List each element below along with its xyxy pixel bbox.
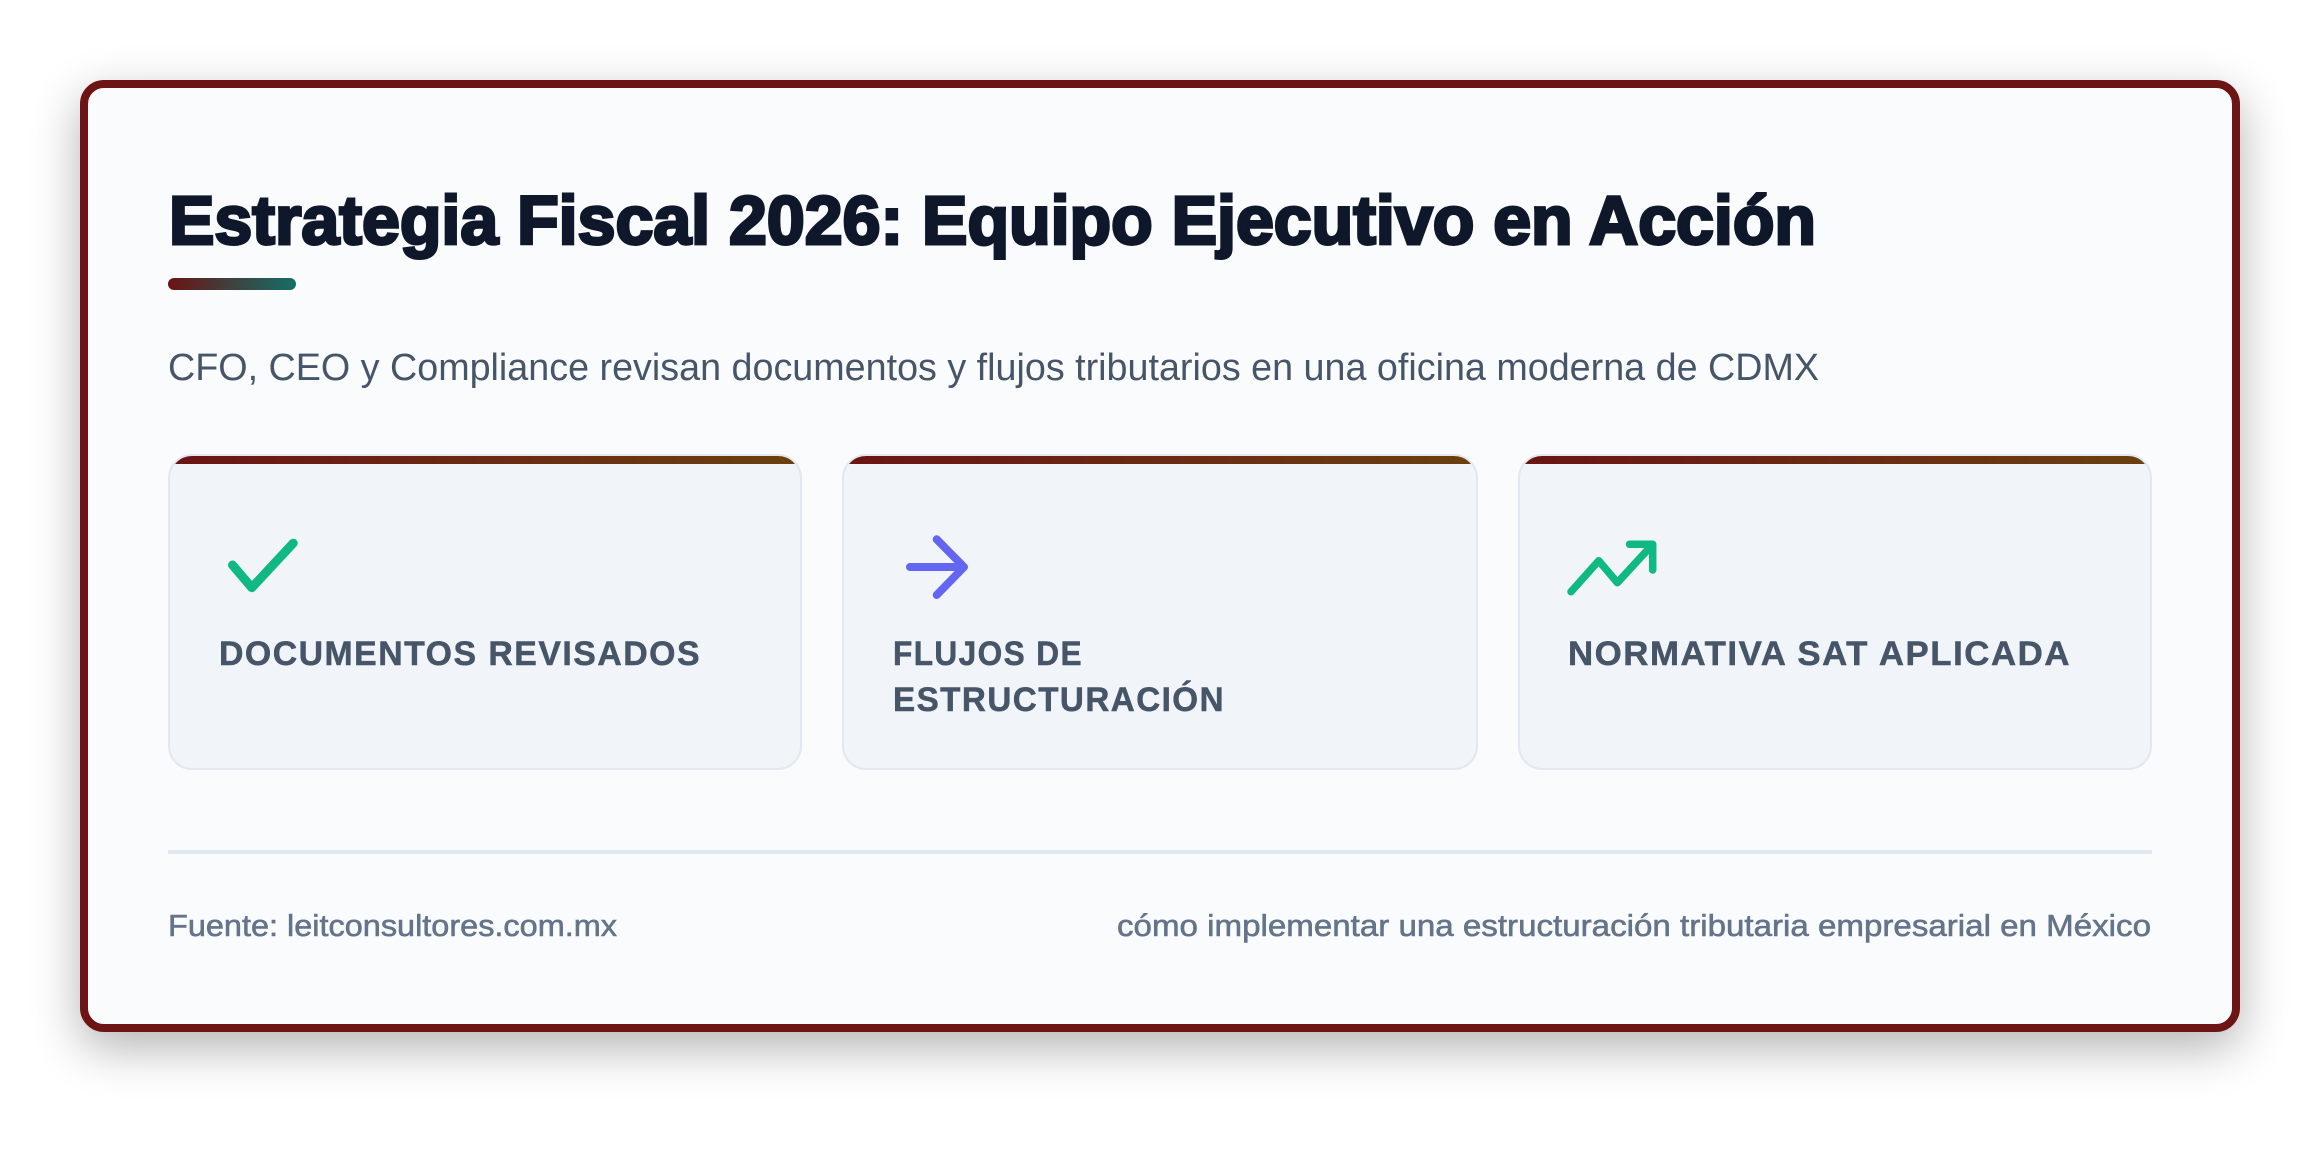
label: normativa sat aplicada: NORMATIVA SAT APLICADA	[1568, 635, 2071, 673]
footer topic: cómo implementar una estructuración tributaria empresarial en México	[1117, 908, 2151, 943]
divider	[168, 850, 2152, 854]
label: flujos de estructuracion	[893, 635, 1225, 719]
label: documentos revisados: DOCUMENTOS REVISADOS	[219, 635, 701, 673]
label: flujos de estructuracion: FLUJOS DE	[893, 635, 1083, 673]
panel: flujos de estructuracion	[842, 454, 1478, 770]
title: Estrategia Fiscal 2026: Equipo Ejecutivo en Acción	[169, 182, 1816, 259]
accent bar under title	[168, 278, 296, 290]
icon: arrow right	[906, 535, 968, 599]
subtitle: CFO, CEO y Compliance revisan documentos y flujos tributarios en una oficina moderna de CDMX	[168, 347, 1819, 389]
card top bar	[1520, 456, 2150, 464]
label: flujos de estructuracion: ESTRUCTURACIÓN	[893, 681, 1225, 719]
panel: documentos revisados	[168, 454, 802, 770]
card top bar	[844, 456, 1476, 464]
panel: main card	[80, 80, 2240, 1032]
icon: trending up	[1567, 540, 1656, 596]
card top bar	[170, 456, 800, 464]
footer source: Fuente: leitconsultores.com.mx	[168, 908, 618, 943]
panel: normativa sat aplicada	[1518, 454, 2152, 770]
icon: check mark	[228, 538, 298, 592]
